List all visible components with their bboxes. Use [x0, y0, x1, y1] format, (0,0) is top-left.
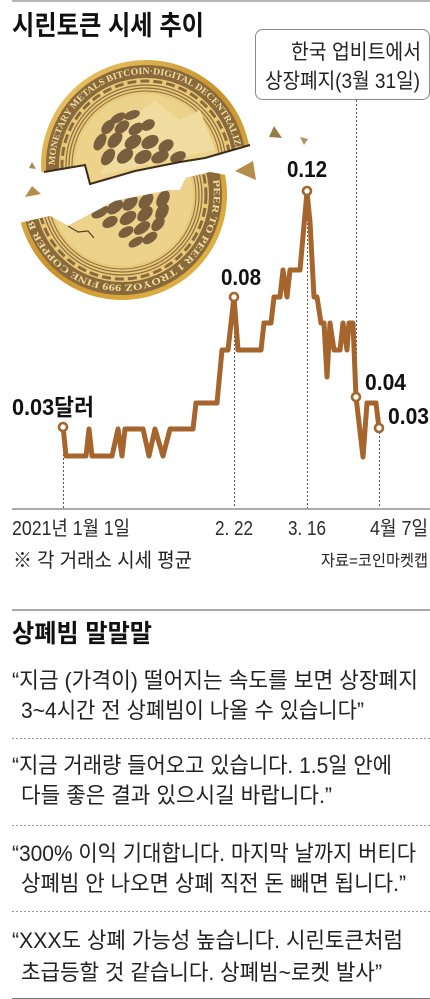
callout: Upbit delisting: 한국 업비트에서: [291, 41, 421, 64]
quote 4: “XXX도 상폐 가능성 높습니다. 시린토큰처럼: [12, 928, 403, 953]
line chart: token price: [12, 100, 430, 540]
quote 3: 상폐빔 안 나오면 상폐 직전 돈 빼면 됩니다.”: [21, 871, 406, 896]
section heading: 상폐빔 말말말: [12, 620, 152, 648]
axis date labels: 2. 22: [215, 518, 253, 540]
chart axis line: [12, 508, 430, 510]
coin crack edge: [44, 145, 250, 184]
quote 1: [12, 668, 418, 723]
axis date labels: [12, 517, 428, 540]
illustration: broken gold coin: [20, 60, 308, 300]
quote 2: 다들 좋은 결과 있으시길 바랍니다.”: [21, 783, 332, 808]
data point markers: [59, 187, 383, 432]
coin upper half: MONETARY METALS BITCOIN·DIGITAL DECENTRALIZED: [48, 68, 242, 165]
title: 시린토큰 시세 추이: [12, 11, 204, 41]
price line: [63, 192, 379, 457]
quote 1: 3~4시간 전 상폐빔이 나올 수 있습니다”: [21, 698, 364, 723]
axis date labels: 3. 16: [288, 518, 326, 540]
value labels: 0.04: [365, 369, 406, 395]
quote 4: [12, 928, 403, 985]
coin shards: [25, 126, 308, 197]
quote 1: “지금 (가격이) 떨어지는 속도를 보면 상장폐지: [12, 668, 418, 693]
value labels: 0.08: [221, 264, 261, 290]
quote 3: [12, 841, 416, 896]
callout: Upbit delisting: [256, 30, 430, 100]
value labels: 0.12: [287, 156, 327, 182]
value labels: 0.03달러: [12, 394, 94, 420]
dotted guide lines: [64, 100, 380, 508]
value labels: [12, 156, 429, 429]
quote 2: “지금 거래량 들어오고 있습니다. 1.5일 안에: [12, 753, 392, 778]
quote 2: [12, 753, 392, 808]
quote 4: 초급등할 것 같습니다. 상폐빔~로켓 발사”: [21, 960, 382, 985]
quote 3: “300% 이익 기대합니다. 마지막 날까지 버티다: [12, 841, 416, 866]
coin lower half: PEER TO PEER 1 TROYOZ 999 FINE COPPER BTB: [27, 180, 220, 291]
chart note: ※ 각 거래소 시세 평균: [13, 549, 192, 572]
axis date labels: 2021년 1월 1일: [12, 517, 130, 540]
